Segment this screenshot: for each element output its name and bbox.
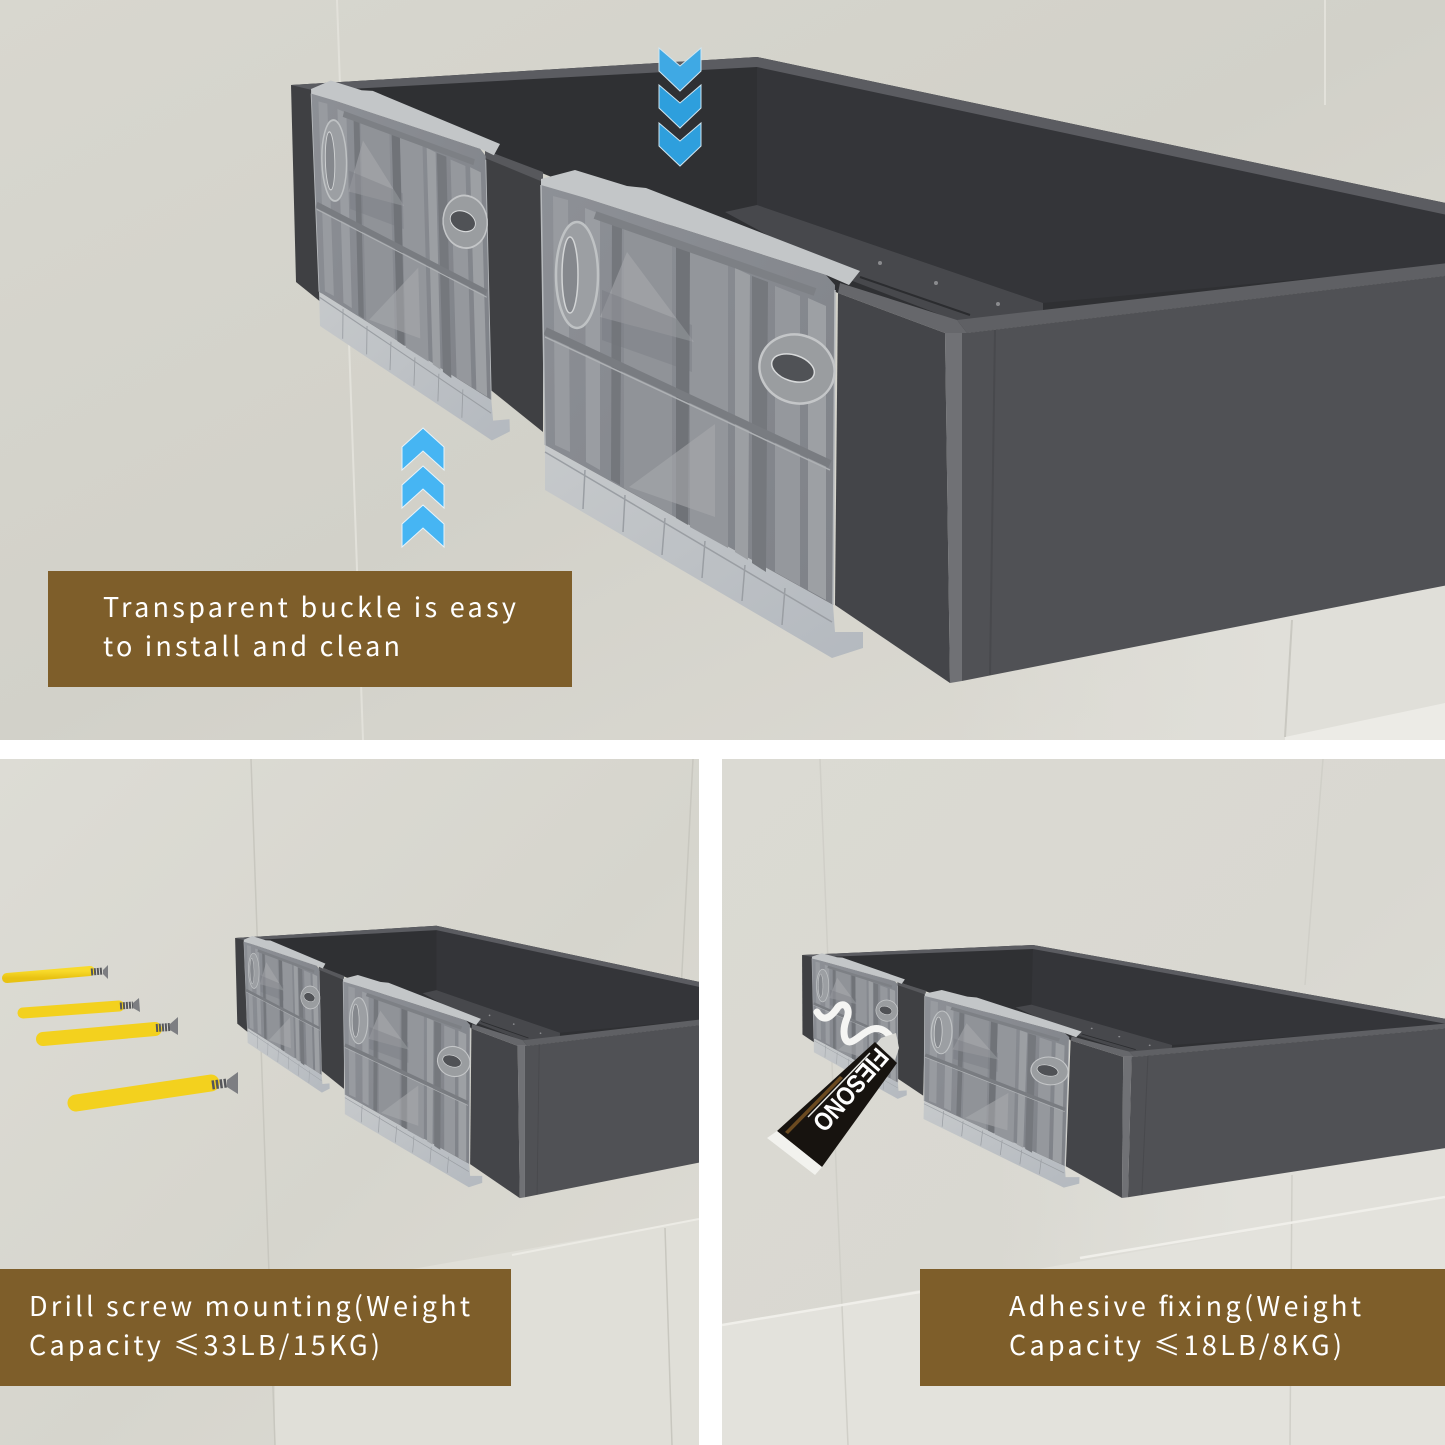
- callout: adhesive fixing: Capacity ≤18LB/8KG): [1009, 1324, 1342, 1363]
- wall background: [0, 0, 1445, 740]
- icon: adhesive bead: [817, 1005, 893, 1042]
- arrow: upward chevrons: [402, 428, 444, 547]
- callout: transparent buckle: Transparent buckle is easy: [103, 586, 516, 625]
- callout: adhesive fixing: [920, 1269, 1445, 1386]
- panel: transparent buckle installation: [0, 0, 1445, 740]
- panel: adhesive fixing: [722, 759, 1445, 1445]
- arrow: downward chevrons: [659, 48, 701, 166]
- callout: drill screw mounting: Capacity ≤33LB/15KG): [29, 1324, 380, 1363]
- wall background: [0, 759, 699, 1445]
- shelf with transparent buckles: [291, 57, 1445, 683]
- callout: transparent buckle: to install and clean: [103, 625, 400, 664]
- icon: adhesive tube: [767, 1033, 899, 1175]
- shelf: [796, 944, 1445, 1200]
- icon: wall anchors and screws: [7, 965, 238, 1103]
- icon: adhesive tube: FIESONO: [807, 1042, 895, 1137]
- panel: drill screw mounting: [0, 759, 699, 1445]
- shelf: [235, 926, 699, 1198]
- callout: drill screw mounting: [0, 1269, 511, 1386]
- callout: transparent buckle: [48, 571, 572, 687]
- wall background: [722, 759, 1445, 1324]
- callout: adhesive fixing: Adhesive fixing(Weight: [1009, 1285, 1361, 1324]
- callout: drill screw mounting: Drill screw mounting(Weight: [29, 1285, 470, 1324]
